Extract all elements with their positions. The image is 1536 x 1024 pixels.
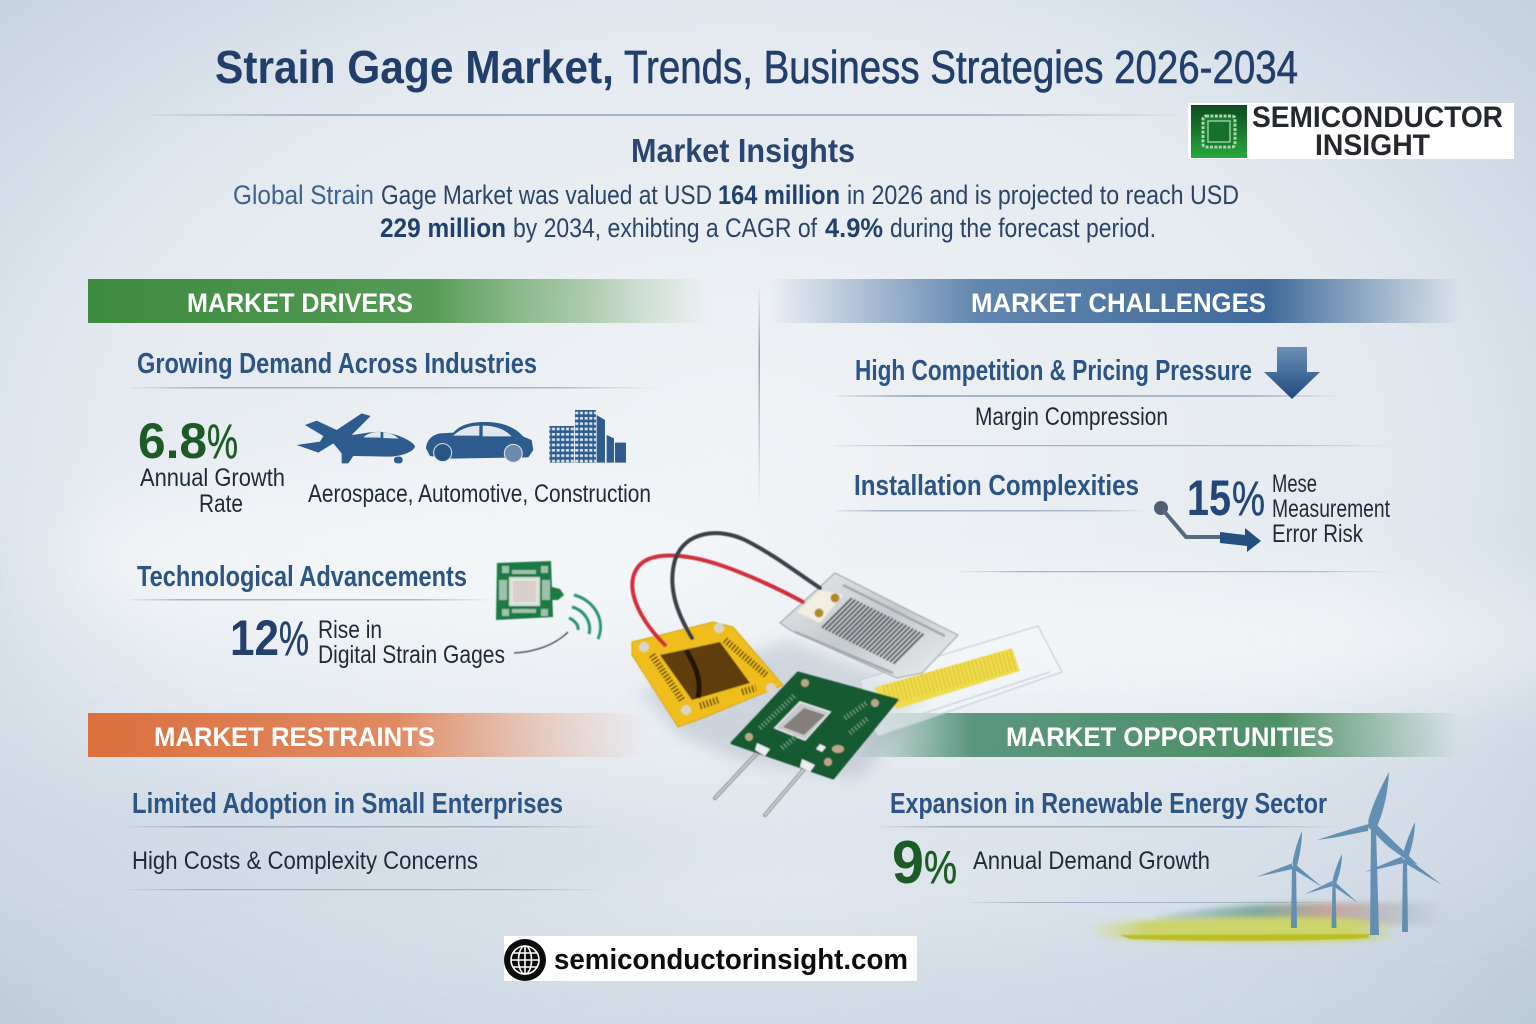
banner: market challenges: MARKET CHALLENGES (971, 288, 1266, 318)
stat: 15% measurement error risk (1187, 470, 1390, 548)
footer: website badge (504, 936, 917, 981)
stat: 15% measurement error risk: Measurement (1272, 495, 1390, 523)
stat: 6.8% annual growth rate (138, 413, 285, 518)
summary paragraph: 164 million (718, 180, 840, 210)
icon: buildings (549, 410, 626, 463)
stat: 6.8% annual growth rate: Annual Growth (140, 464, 285, 492)
summary paragraph: during the forecast period. (890, 213, 1156, 243)
icon: globe (504, 939, 546, 981)
stat: 15% measurement error risk: % (1232, 473, 1265, 526)
heading: high competition: High Competition & Pricing Pressure (855, 355, 1252, 387)
panel: market challenges (770, 279, 1460, 572)
stat: 12% digital strain gages: Rise in (318, 616, 382, 644)
icon: logo chip (1191, 105, 1247, 158)
panel: market drivers (88, 279, 708, 669)
summary paragraph: Global Strain (233, 180, 374, 210)
heading: technological advancements: Technological Advancements (137, 561, 467, 593)
icon: chip with wireless signal (496, 561, 601, 653)
green circuit board with pins (715, 673, 897, 815)
icon: car (426, 422, 533, 462)
heading: growing demand: Growing Demand Across Industries (137, 348, 537, 380)
title: Trends, Business Strategies 2026-2034 (624, 41, 1298, 93)
logo: Semiconductor Insight: SEMICONDUCTOR (1252, 101, 1503, 134)
title: Strain Gage Market, (215, 41, 614, 93)
wind turbines (1256, 772, 1442, 935)
stat: 12% digital strain gages: % (279, 613, 309, 666)
illustration: strain gage components (632, 533, 1062, 815)
banner: market opportunities: MARKET OPPORTUNITIES (1006, 722, 1334, 752)
icon: down arrow (1264, 347, 1320, 399)
summary paragraph: 4.9% (825, 213, 883, 243)
stat: 6.8% annual growth rate: Rate (199, 490, 243, 518)
panel: market restraints (88, 713, 648, 890)
logo: Semiconductor Insight: INSIGHT (1315, 129, 1430, 162)
summary paragraph: Gage Market was valued at USD (381, 180, 712, 210)
silver foil gage (780, 573, 958, 678)
wires (632, 533, 820, 645)
icon: airplane (297, 413, 415, 463)
summary paragraph: in 2026 and is projected to reach USD (847, 180, 1239, 210)
heading: market insights: Market Insights (631, 132, 855, 169)
clear film with yellow strain strip (860, 626, 1062, 736)
yellow sensor pad (632, 622, 783, 727)
banner: market restraints (88, 713, 648, 757)
heading: limited adoption: Limited Adoption in Small Enterprises (132, 788, 563, 820)
stat: 6.8% annual growth rate: % (207, 416, 238, 469)
stat: 12% digital strain gages: 12 (230, 610, 279, 666)
banner: market drivers (88, 279, 708, 323)
banner: market restraints: MARKET RESTRAINTS (154, 722, 435, 752)
illustration: wind farm (1085, 772, 1445, 942)
panel: market opportunities (850, 713, 1460, 942)
stat: 6.8% annual growth rate: 6.8 (138, 413, 207, 469)
title (215, 41, 1298, 93)
text: sectors: Aerospace, Automotive, Construction (308, 480, 651, 508)
stat: 9% annual demand growth: 9 (892, 829, 924, 896)
stat: 12% digital strain gages (230, 610, 505, 669)
banner: market challenges (770, 279, 1460, 323)
summary paragraph (233, 180, 1239, 243)
landscape (1085, 902, 1445, 942)
summary paragraph: by 2034, exhibting a CAGR of (513, 213, 817, 243)
text: margin compression: Margin Compression (975, 403, 1168, 431)
summary paragraph: 229 million (380, 213, 506, 243)
stat: 9% annual demand growth: Annual Demand Growth (973, 847, 1210, 875)
device shadow (640, 640, 930, 780)
heading: installation complexities: Installation Complexities (854, 470, 1139, 502)
heading: expansion in renewable energy: Expansion in Renewable Energy Sector (890, 788, 1327, 820)
stat: 12% digital strain gages: Digital Strain Gages (318, 641, 505, 669)
stat: 15% measurement error risk: 15 (1187, 470, 1231, 526)
logo: Semiconductor Insight (1188, 101, 1514, 162)
stat: 15% measurement error risk: Mese (1272, 470, 1317, 498)
stat: 9% annual demand growth: % (924, 841, 957, 893)
text: high costs: High Costs & Complexity Concerns (132, 847, 478, 875)
stat: 15% measurement error risk: Error Risk (1272, 520, 1363, 548)
icon: connector arrow (1154, 501, 1261, 552)
stat: 9% annual demand growth (892, 829, 1210, 896)
banner: market drivers: MARKET DRIVERS (187, 288, 413, 318)
footer: website badge: semiconductorinsight.com (554, 944, 908, 976)
banner: market opportunities (850, 713, 1460, 757)
